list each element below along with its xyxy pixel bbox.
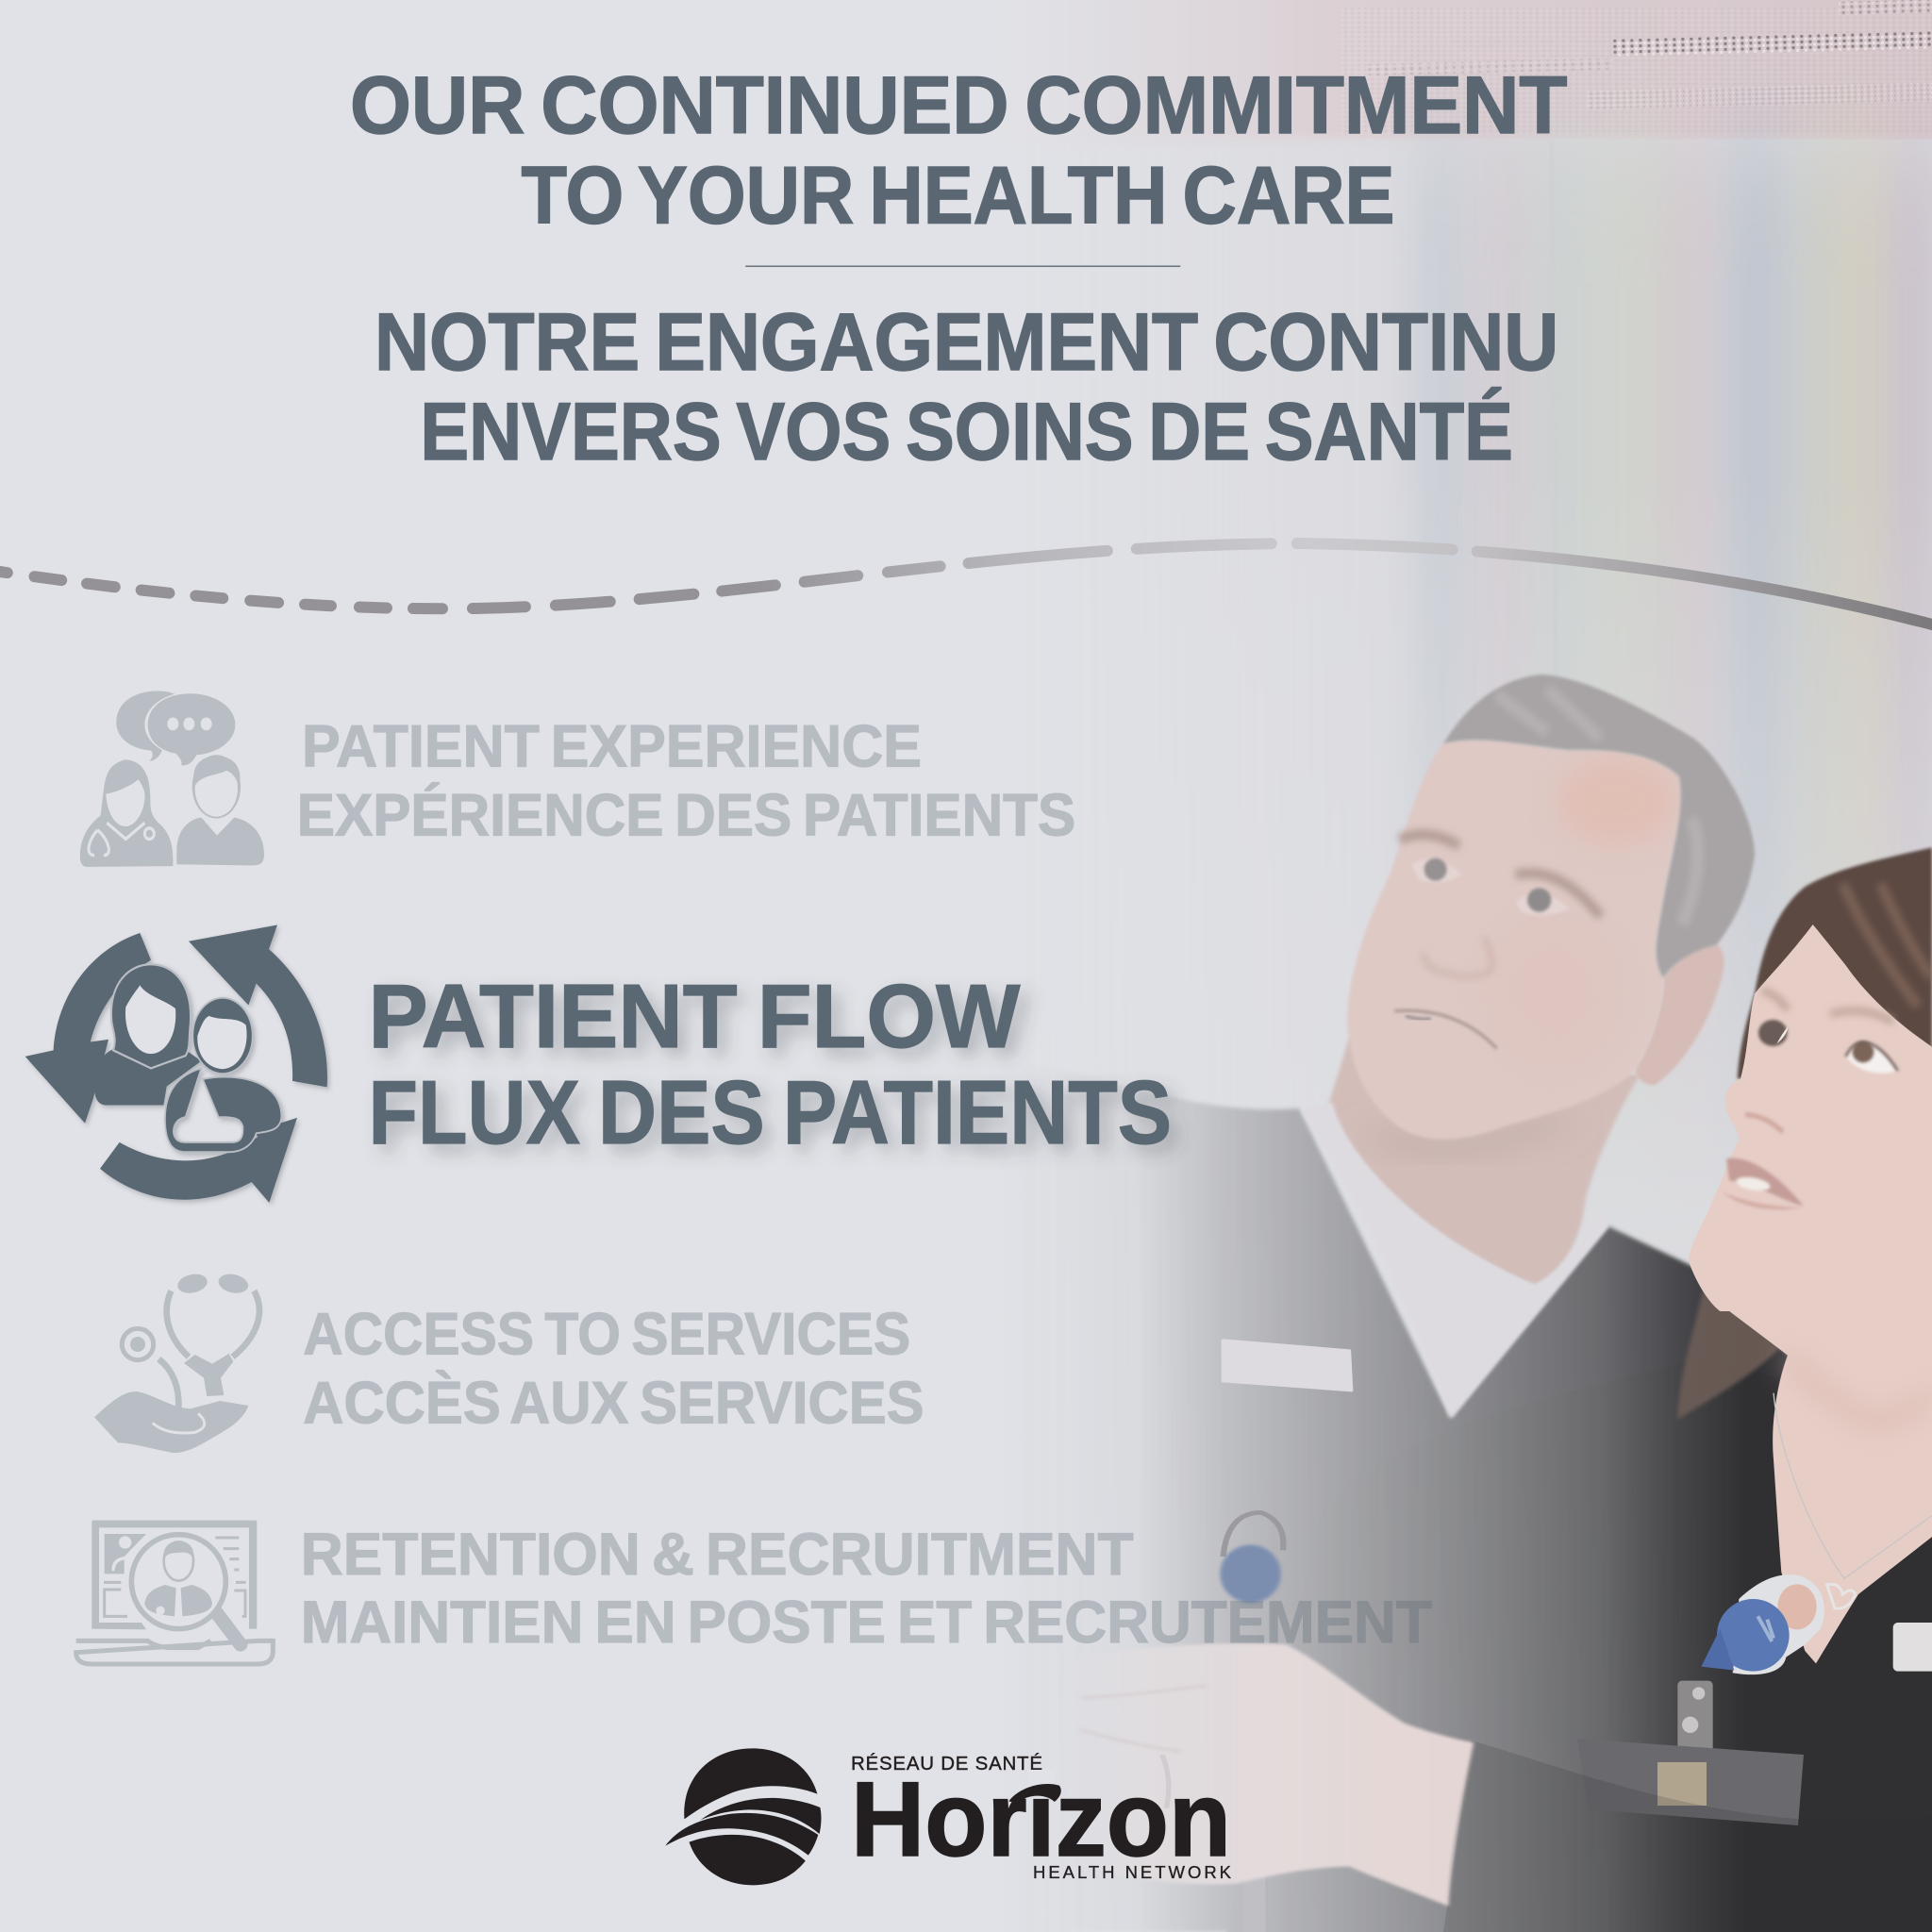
man: scrub top bbox=[1143, 1094, 1788, 1932]
man: hair bbox=[1443, 675, 1755, 978]
woman: neck and chest bbox=[1717, 1299, 1932, 1663]
heading line 1: OUR CONTINUED COMMITMENT bbox=[350, 60, 1567, 151]
label: access to services: ACCESS TO SERVICES bbox=[303, 1301, 910, 1367]
lanyard stem bbox=[1244, 1874, 1265, 1932]
icon: patients with circular arrows bbox=[25, 925, 327, 1203]
woman: right eye bbox=[1846, 1042, 1898, 1074]
label: patient flow: FLUX DES PATIENTS bbox=[369, 1063, 1172, 1163]
clothing: dark scrubs fading to the left bbox=[1143, 1094, 1932, 1932]
logo text: health network: HEALTH NETWORK bbox=[1033, 1862, 1232, 1882]
man: head bbox=[1347, 675, 1755, 1140]
clip ring opening bbox=[1777, 1584, 1817, 1629]
pastel curtain bbox=[1385, 101, 1932, 1226]
man: hair highlights bbox=[1497, 689, 1698, 924]
woman: brows bbox=[1761, 991, 1893, 1023]
label: retention and recruitment: MAINTIEN EN POSTE ET RECRUTEMENT bbox=[301, 1590, 1432, 1656]
item: retention and recruitment bbox=[76, 1521, 1432, 1664]
woman: heart pendant bbox=[1827, 1584, 1856, 1608]
icon: laptop with magnifier over doctor bbox=[76, 1521, 273, 1664]
label: patient experience bbox=[297, 713, 1075, 849]
logo swoosh over the i bbox=[1008, 1784, 1061, 1804]
man: right eye bbox=[1516, 892, 1569, 915]
woman: lips bbox=[1726, 1158, 1804, 1206]
man: neck shadow under jaw bbox=[1374, 1120, 1560, 1148]
hand bbox=[1063, 1643, 1474, 1907]
woman: head bbox=[1689, 847, 1932, 1311]
man: forehead blush bbox=[1557, 758, 1676, 846]
heading block bbox=[350, 60, 1567, 477]
man: face bbox=[1347, 740, 1681, 1140]
heading divider bbox=[745, 265, 1180, 267]
label: retention and recruitment bbox=[301, 1522, 1432, 1656]
icon: patient and doctor conversation bbox=[80, 691, 264, 867]
item: access to services bbox=[94, 1272, 924, 1453]
man: brows bbox=[1399, 835, 1601, 917]
dashed path curve bbox=[0, 543, 1932, 625]
woman: left eye bbox=[1758, 1020, 1788, 1046]
man: badge reel bbox=[1220, 1512, 1283, 1932]
heading line 3: NOTRE ENGAGEMENT CONTINU bbox=[375, 297, 1558, 388]
man: cheek tone bbox=[1481, 912, 1625, 1069]
label: patient experience: PATIENT EXPERIENCE bbox=[302, 713, 922, 779]
woman: chest, necklace, badge bbox=[1677, 1299, 1932, 1757]
woman: hair bbox=[1738, 847, 1932, 1082]
label: access to services: ACCÈS AUX SERVICES bbox=[303, 1371, 924, 1437]
logo mark: sphere with swooshes bbox=[665, 1748, 822, 1885]
label: patient flow: PATIENT FLOW bbox=[369, 967, 1020, 1067]
logo: Horizon Health Network bbox=[665, 1748, 1232, 1885]
woman: silver badge clip bbox=[1733, 1574, 1824, 1674]
heading line 4: ENVERS VOS SOINS DE SANTÉ bbox=[420, 386, 1513, 477]
woman: black top bbox=[1226, 1537, 1932, 1932]
hand: finger creases bbox=[1080, 1686, 1207, 1752]
woman: face bbox=[1689, 924, 1932, 1311]
label: access to services bbox=[303, 1301, 924, 1437]
cover for the i dot bbox=[1028, 1770, 1054, 1795]
label: retention and recruitment: RETENTION & RECRUITMENT bbox=[301, 1522, 1134, 1588]
man: mouth bbox=[1394, 1010, 1497, 1049]
woman: name tag bbox=[1893, 1623, 1932, 1672]
woman: nose bbox=[1745, 1115, 1783, 1132]
woman: necklace bbox=[1774, 1393, 1932, 1578]
woman: badge holder bbox=[1577, 1739, 1804, 1825]
item: patient flow (highlighted) bbox=[25, 925, 1172, 1203]
man: ear bbox=[1635, 945, 1724, 1086]
woman: blue badge reel bbox=[1701, 1599, 1790, 1672]
man: left eye bbox=[1412, 858, 1462, 883]
man: white t-shirt bbox=[1301, 1102, 1608, 1419]
man: name tag bbox=[1223, 1341, 1352, 1391]
man: nose bbox=[1423, 937, 1491, 976]
woman: back hair bbox=[1677, 1264, 1788, 1420]
hand: ring bbox=[1162, 1755, 1169, 1808]
woman: hair highlights bbox=[1842, 884, 1932, 1007]
woman: sleeve edge bbox=[1443, 1740, 1932, 1932]
heading line 2: TO YOUR HEALTH CARE bbox=[521, 150, 1395, 241]
woman: jaw shadow bbox=[1786, 1356, 1932, 1423]
label: patient flow bbox=[369, 967, 1172, 1163]
photo: two nurses with curtain behind bbox=[1079, 0, 1932, 1932]
logo text: réseau de santé: RÉSEAU DE SANTÉ bbox=[851, 1753, 1042, 1774]
item: patient experience bbox=[80, 691, 1075, 867]
man: neck bbox=[1328, 1038, 1640, 1286]
logo text: Horizon: Horizon bbox=[851, 1760, 1231, 1878]
icon: stethoscope over hand bbox=[94, 1272, 259, 1453]
woman: teeth bbox=[1735, 1174, 1772, 1193]
curtain header with mesh bbox=[991, 0, 1932, 142]
label: patient experience: EXPÉRIENCE DES PATIENTS bbox=[297, 783, 1075, 849]
woman: badge strap bbox=[1677, 1681, 1713, 1757]
